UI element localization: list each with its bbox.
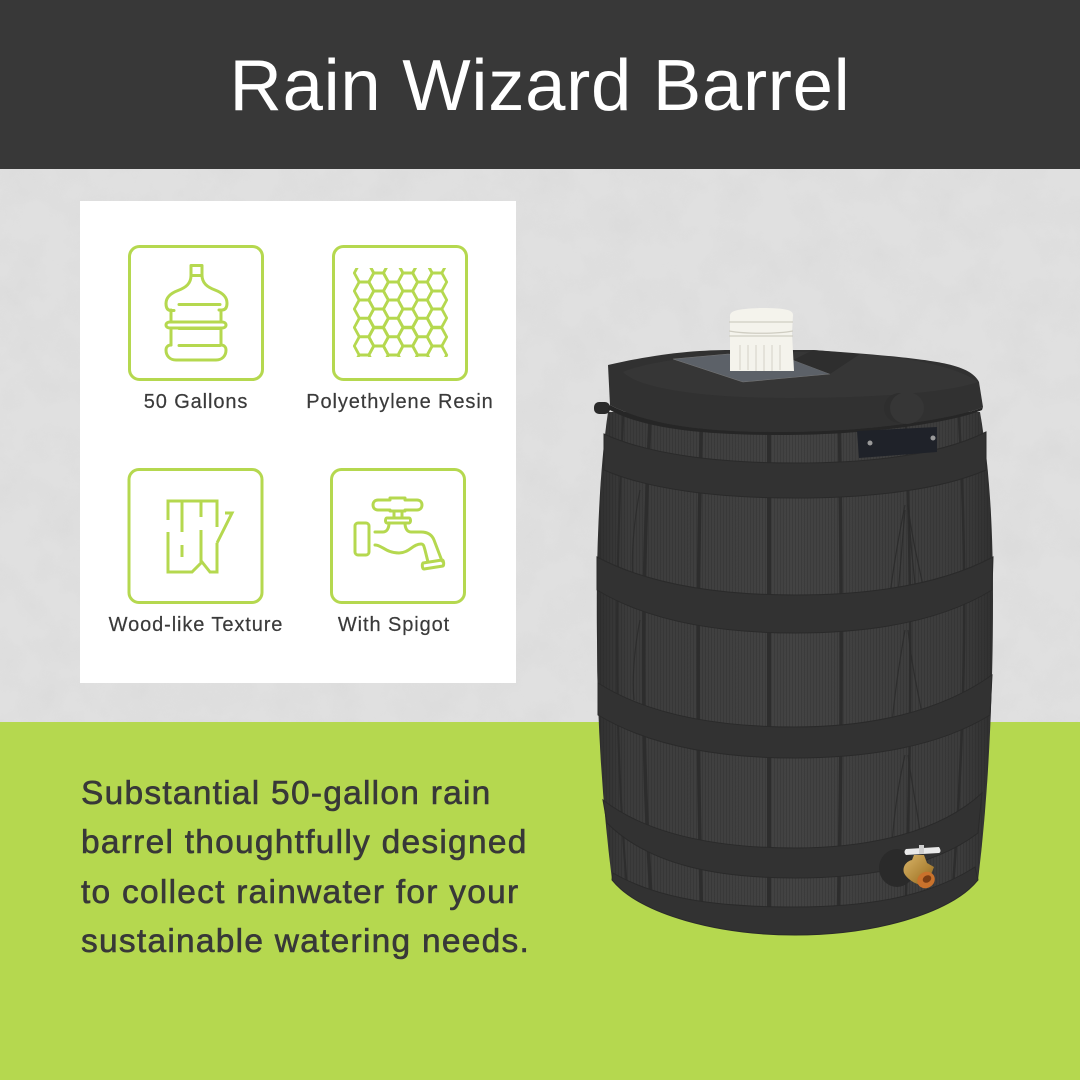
brass spigot: [879, 845, 940, 891]
wood grain knots: [632, 490, 925, 845]
white downspout adapter: [729, 308, 794, 371]
description text: Substantial 50-gallon rain: [81, 775, 492, 812]
label: Wood-like Texture: Wood-like Texture: [109, 614, 283, 636]
barrel lid: [608, 350, 983, 435]
description text: to collect rainwater for your: [81, 874, 519, 911]
description text: [81, 775, 530, 960]
stave seams: [617, 400, 964, 935]
title banner: [0, 0, 1080, 169]
green lower band: [0, 722, 1080, 1080]
dark lid slot: [793, 350, 860, 374]
rain barrel illustration: [594, 308, 994, 936]
mesh vent: [857, 427, 937, 458]
description text: barrel thoughtfully designed: [81, 824, 528, 861]
barrel hoops: [597, 432, 993, 935]
feature icons: [128, 245, 468, 604]
icon: water bottle: [130, 246, 262, 380]
icon: spigot: [332, 470, 464, 602]
overflow knob: [884, 392, 924, 424]
label: Polyethylene Resin: Polyethylene Resin: [306, 391, 494, 413]
concrete background: [0, 169, 1080, 722]
title banner: Rain Wizard Barrel: [230, 45, 850, 126]
label: With Spigot: With Spigot: [338, 614, 450, 636]
side tab: [594, 402, 610, 414]
icon: honeycomb resin: [334, 246, 466, 380]
panel: product features: [80, 201, 516, 683]
mounting plate: [673, 354, 830, 382]
description text: sustainable watering needs.: [81, 923, 530, 960]
icon: wood texture: [129, 470, 262, 602]
barrel body: [596, 412, 993, 906]
label: 50 Gallons: 50 Gallons: [144, 391, 248, 413]
